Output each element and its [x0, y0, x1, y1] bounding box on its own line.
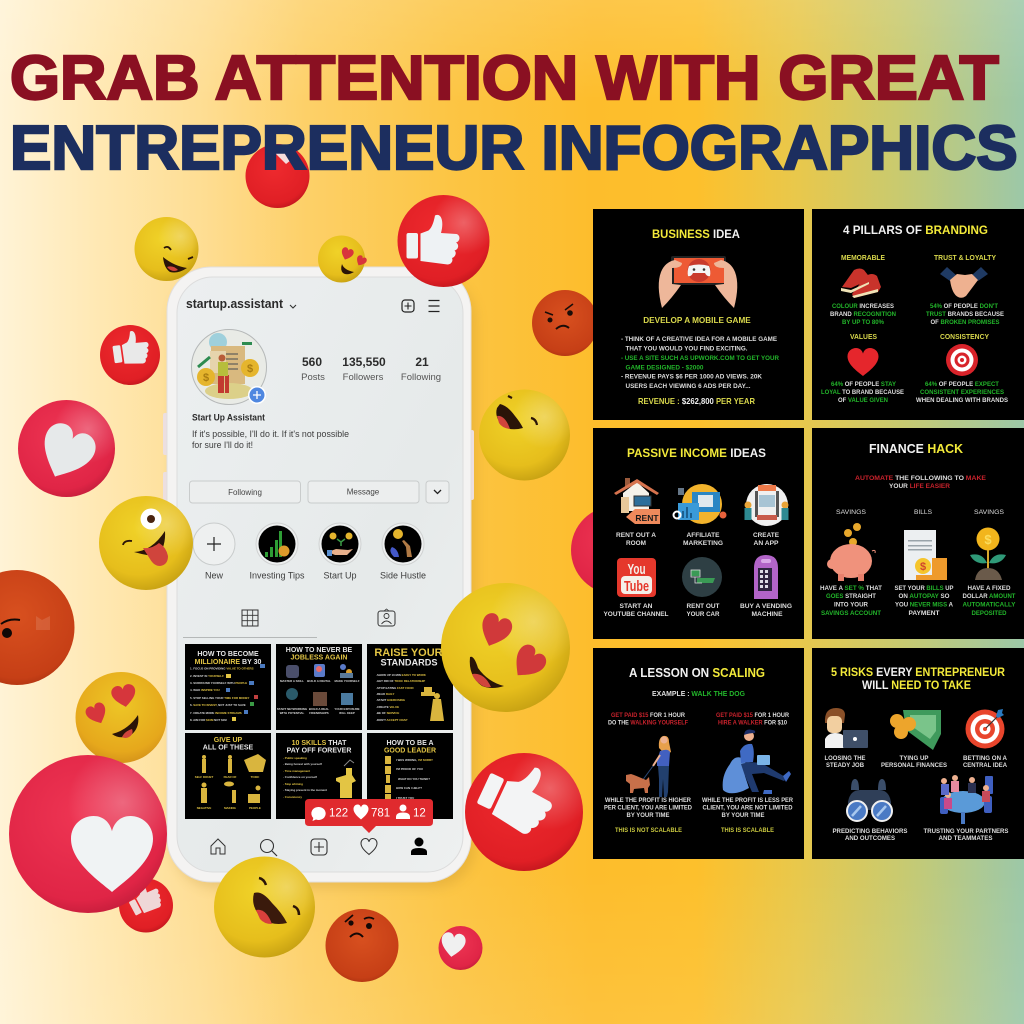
post tile 4: FEAR OF [224, 775, 237, 779]
title [10, 44, 1018, 183]
avatar [192, 330, 266, 404]
profile stats: 560 [302, 355, 322, 369]
pillar: memorable: BY UP TO 80% [842, 319, 884, 326]
post tile 4: TOXIC [251, 775, 260, 779]
post tile 2: BUILD A REAL [309, 707, 329, 711]
scenario: walking yourself: DO THE WALKING YOURSELF [608, 720, 688, 726]
post tile 6: GOOD LEADER [384, 748, 436, 754]
right explanation: WHILE THE PROFIT IS LESS PER [702, 797, 793, 804]
post tile 3 [367, 644, 453, 730]
post tile 6: HOW TO BE A [386, 740, 434, 747]
right explanation [702, 797, 793, 834]
idea: create an app [744, 484, 788, 547]
profile stats: Followers [343, 372, 384, 383]
risk: trusting partners and teammates: AND TEAMMATES [938, 835, 992, 842]
panel heading: PASSIVE INCOME IDEAS [627, 446, 766, 460]
notification bubble: 122 [329, 808, 348, 820]
profile buttons: Following [228, 488, 262, 497]
column: savings plant [962, 509, 1016, 617]
bio [192, 412, 349, 450]
idea: affiliate marketing [674, 484, 726, 547]
risk: betting on a central idea [963, 709, 1007, 769]
pillar: trust and loyalty [926, 255, 1004, 326]
post tile 2: MAKE YOURSELF [334, 679, 360, 683]
emoji: wide laugh right [479, 390, 570, 480]
post tile 2: FRIENDSHIPS [309, 711, 329, 715]
panel: passive income ideas [593, 428, 804, 639]
post tile 4: GIVE UP [214, 737, 243, 744]
post tile 5: 10 SKILLS THAT [292, 740, 347, 747]
panel: finance hack [812, 428, 1024, 639]
notification bubble: 781 [371, 808, 390, 820]
pillar: values: VALUES [850, 334, 877, 341]
post tile 5: - Time management [283, 769, 310, 773]
post tile 4: SELF DOUBT [195, 775, 213, 779]
pillar: trust and loyalty: 54% OF PEOPLE DON'T [930, 303, 998, 310]
risk: betting on a central idea: CENTRAL IDEA [963, 762, 1007, 769]
profile buttons: Message [347, 488, 380, 496]
body text: USERS EACH VIEWING 6 ADS PER DAY... [626, 383, 751, 390]
pillar: values: LOYAL TO BRAND BECAUSE [821, 389, 904, 396]
notification bubble [305, 799, 433, 833]
post tile 3: -READ DAILY [376, 692, 394, 696]
post tile 1: 5. STOP SELLING YOUR TIME FOR MONEY [190, 696, 250, 700]
post tile 2: JOBLESS AGAIN [291, 654, 347, 662]
scenario: walking yourself: GET PAID $15 FOR 1 HOUR [611, 712, 685, 719]
idea: start a youtube channel [604, 558, 668, 618]
panel heading: A LESSON ON SCALING [629, 666, 765, 680]
icon: mobile game in hands [659, 256, 737, 308]
post tile 6: HOW CAN I HELP? [396, 786, 422, 790]
idea: rent out your car: YOUR CAR [686, 611, 720, 618]
post tile 1: 8. AIM FOR $10M NOT $1M [190, 718, 227, 722]
post tile 5: - Being honest with yourself [283, 762, 322, 766]
pillar: values: OF VALUE GIVEN [838, 397, 888, 404]
post tile 5: - Consistency [283, 795, 302, 799]
idea: affiliate marketing: MARKETING [683, 540, 723, 547]
left explanation: THIS IS NOT SCALABLE [615, 827, 683, 834]
post tile 3: RAISE YOUR [374, 647, 443, 659]
pillar: trust and loyalty: OF BROKEN PROMISES [930, 319, 1000, 326]
profile header [186, 296, 440, 312]
pillar: trust and loyalty: TRUST BRANDS BECAUSE [926, 311, 1004, 318]
emoji: red ball behind title [246, 144, 310, 208]
risk: loosing the steady job: LOOSING THE [824, 755, 866, 762]
risk: tying up personal finances: PERSONAL FINANCES [881, 762, 947, 769]
post tile 1: 2. INVEST IN YOURSELF [190, 674, 224, 678]
post tile 1: 1. FOCUS ON PROVIDING VALUE TO OTHERS [190, 666, 254, 670]
pillar: memorable: COLOUR INCREASES [832, 303, 894, 310]
right explanation: BY YOUR TIME [722, 812, 764, 819]
post tile 3: -BE OF SERVICE [376, 711, 399, 715]
pillar: consistency: WHEN DEALING WITH BRANDS [916, 397, 1008, 404]
idea: affiliate marketing: AFFILIATE [686, 532, 720, 539]
bio: for sure I'll do it! [192, 440, 253, 450]
emoji: tongue wink [99, 496, 193, 590]
idea: buy a vending machine [740, 555, 792, 618]
post tile 4: MAKING [224, 806, 237, 810]
scenario: walking yourself [608, 712, 688, 797]
panel: a lesson on scaling [593, 648, 804, 859]
left explanation: WHILE THE PROFIT IS HIGHER [605, 797, 691, 804]
post tile 2: MASTER A SKILL [280, 679, 304, 683]
column: savings percent: INTO YOUR [834, 602, 868, 608]
emoji: laughing wink small [134, 217, 198, 281]
right explanation: THIS IS SCALABLE [721, 827, 775, 834]
post tile 1: 4. WHO INSPIRE YOU [190, 688, 220, 692]
post tile 3: -START EXERCISING [376, 698, 406, 702]
post tile 2: BUILD A DIGITAL [307, 679, 331, 683]
risk: predicting behaviors: AND OUTCOMES [845, 835, 895, 842]
post tile 2: YOUR EXPOSURE [334, 707, 360, 711]
post tile 2: WITH POTENTIAL [280, 711, 305, 715]
column: savings plant: DOLLAR AMOUNT [962, 593, 1016, 600]
post tile 3: -CREATE VALUE [376, 705, 399, 709]
revenue: REVENUE : $262,800 PER YEAR [638, 396, 755, 406]
post tile 4: ALL OF THESE [203, 744, 254, 752]
post tile 6: I WAS WRONG, I'M SORRY [396, 758, 433, 762]
left explanation: BY YOUR TIME [626, 812, 670, 819]
emoji: big heart [9, 755, 167, 913]
scenario: hire a walker: GET PAID $15 FOR 1 HOUR [716, 712, 789, 719]
profile stats [301, 355, 441, 383]
post tile 2 [276, 644, 362, 730]
pillar: memorable: MEMORABLE [841, 255, 885, 262]
idea: rent out your car: RENT OUT [686, 603, 720, 610]
idea: create an app: CREATE [753, 532, 779, 539]
risk: trusting partners and teammates [924, 775, 1008, 842]
story highlights: Side Hustle [380, 570, 426, 580]
panel heading: FINANCE HACK [869, 441, 964, 456]
body text: - REVENUE PAYS $6 PER 1000 AD VIEWS. 20K [621, 374, 762, 380]
story highlights: New [205, 570, 223, 580]
post tile 3: -STOP EATING FAST FOOD [376, 686, 414, 690]
emoji: big thumbs up bottom right [465, 751, 583, 871]
post tile 1: 6. SAVE TO INVEST, NOT JUST TO SAVE [190, 703, 246, 707]
post tile 1 [185, 644, 271, 730]
post tile 3: -SHOW UP 10 MIN EARLY TO WORK [376, 673, 427, 677]
emoji: laughing bottom [214, 856, 315, 958]
column: bills: YOU NEVER MISS A [895, 602, 953, 608]
example: EXAMPLE : WALK THE DOG [652, 689, 745, 698]
risk: betting on a central idea: BETTING ON A [963, 755, 1007, 762]
emoji: heart eyes small [318, 236, 368, 282]
idea: start a youtube channel: You [628, 561, 646, 578]
profile stats: Posts [301, 372, 325, 383]
profile tabs [183, 609, 395, 638]
profile stats: Following [401, 372, 441, 383]
column: savings plant: HAVE A FIXED [968, 585, 1011, 592]
avatar: $ [247, 363, 253, 375]
panel: business idea [593, 209, 804, 420]
idea: rent out your car [682, 557, 722, 618]
post tile 1: MILLIONAIRE BY 30 [195, 659, 261, 666]
profile buttons [190, 481, 449, 503]
right explanation: CLIENT, YOU ARE NOT LIMITED [702, 804, 793, 812]
emoji: big heart eyes [441, 583, 570, 712]
emoji: small thumb behind heart [119, 878, 173, 932]
intro text: YOUR LIFE EASIER [889, 483, 950, 490]
idea: start a youtube channel: Tube [624, 578, 649, 595]
emoji: angry bottom [326, 909, 398, 982]
idea: start a youtube channel: YOUTUBE CHANNEL [604, 611, 668, 618]
pillar: trust and loyalty: TRUST & LOYALTY [934, 255, 996, 262]
subheading: DEVELOP A MOBILE GAME [643, 315, 751, 325]
column: bills: ON AUTOPAY SO [898, 593, 950, 600]
post tile 6 [367, 733, 453, 819]
post tile 5 [276, 733, 362, 819]
pillar: values: 64% OF PEOPLE STAY [831, 381, 897, 388]
profile stats: 135,550 [342, 355, 386, 369]
column: savings percent: SAVINGS ACCOUNT [821, 610, 881, 617]
column: bills: BILLS [914, 509, 932, 516]
idea: rent out a room: RENT [635, 513, 659, 523]
panel heading: 5 RISKS EVERY ENTREPRENEUR [831, 667, 1006, 679]
column: savings plant: AUTOMATICALLY [962, 602, 1016, 608]
emoji: small heart bottom [438, 926, 482, 970]
idea: buy a vending machine: BUY A VENDING [740, 603, 792, 610]
bio: Start Up Assistant [192, 412, 265, 422]
column: savings percent: HAVE A SET % THAT [820, 585, 882, 592]
panel heading: BUSINESS IDEA [652, 227, 740, 241]
column: savings plant: $ [984, 532, 992, 547]
post tile 4: NEGATIVE [197, 806, 211, 810]
title: ENTREPRENEUR INFOGRAPHICS [10, 114, 1018, 183]
panel heading [831, 667, 1006, 692]
intro text [855, 475, 986, 490]
emoji: angry left [0, 570, 74, 685]
column: bills [894, 509, 954, 617]
avatar: $ [203, 372, 209, 384]
scenario: hire a walker: HIRE A WALKER FOR $10 [718, 720, 787, 726]
profile header: startup.assistant [186, 296, 284, 311]
post tile 4 [185, 733, 271, 819]
pillar: values [821, 334, 904, 404]
panel heading: WILL NEED TO TAKE [862, 680, 971, 692]
phone [163, 267, 476, 888]
column: savings percent: GOES STRAIGHT [826, 593, 876, 600]
risk: predicting behaviors: PREDICTING BEHAVIORS [832, 828, 908, 835]
post tile 5: - Staying present in the moment [283, 788, 327, 792]
emoji: red heart ball behind panel [571, 506, 659, 594]
post tile 2: START NETWORKING [277, 707, 308, 711]
emoji: big thumbs up top [398, 195, 490, 287]
post tile 5: PAY OFF FOREVER [287, 748, 351, 754]
pillar: consistency: CONSISTENCY [940, 334, 989, 341]
story highlights [193, 523, 426, 580]
post tile 5: - Public speaking [283, 756, 307, 760]
post tile 5: - Stop whining [283, 782, 303, 786]
idea: create an app: AN APP [754, 540, 779, 547]
column: savings percent [820, 509, 882, 617]
risk: loosing the steady job: STEADY JOB [826, 762, 864, 769]
body text: THAT YOU WOULD YOU FIND EXCITING. [626, 346, 748, 352]
risk: loosing the steady job [824, 708, 868, 769]
column: savings percent: SAVINGS [836, 509, 866, 516]
pillar: memorable [830, 255, 896, 326]
panel heading: 4 PILLARS OF BRANDING [843, 223, 988, 237]
post tile 1: HOW TO BECOME [197, 651, 259, 658]
story highlights: Investing Tips [249, 570, 305, 580]
body text: GAME DESIGNED - $2000 [626, 364, 704, 372]
phone screen [177, 277, 463, 872]
story highlights: Start Up [323, 570, 357, 580]
idea: start a youtube channel: START AN [620, 603, 653, 610]
pillar: consistency [916, 334, 1008, 404]
column: bills: $ [920, 561, 926, 573]
scenario: hire a walker [716, 712, 791, 794]
panel: 5 risks every entrepreneur [812, 648, 1024, 859]
pillar: consistency: CONSISTENT EXPERIENCES [920, 389, 1004, 396]
column: savings plant: SAVINGS [974, 509, 1004, 516]
pillar: memorable: BRAND RECOGNITION [830, 311, 896, 318]
column: savings plant: DEPOSITED [972, 610, 1007, 617]
idea: buy a vending machine: MACHINE [752, 611, 783, 618]
emoji: heart left [18, 400, 115, 497]
emoji: heart eyes left [76, 672, 166, 763]
panel: 4 pillars of branding [812, 209, 1024, 420]
notification bubble: 12 [413, 808, 426, 820]
title: GRAB ATTENTION WITH GREAT [10, 44, 999, 113]
bio: If it's possible, I'll do it. If it's not possible [192, 429, 349, 439]
pillar: consistency: 64% OF PEOPLE EXPECT [925, 381, 999, 388]
idea: rent out a room [614, 478, 660, 547]
risk: trusting partners and teammates: TRUSTING YOUR PARTNERS [924, 828, 1008, 835]
post tile 1: 7. CREATE MORE INCOME STREAMS [190, 711, 242, 715]
post tile 1: 3. SURROUND YOURSELF WITH PEOPLE [190, 681, 247, 685]
body text [621, 336, 779, 390]
risk: tying up personal finances [881, 710, 947, 769]
post tile 6: I TRUST YOU [396, 796, 414, 800]
phone shadow [172, 276, 476, 888]
bottom navigation [211, 838, 427, 856]
post tile 6: I'M PROUD OF YOU [396, 767, 423, 771]
post tile 4: PEOPLE [249, 806, 261, 810]
post tile 3: -GET RID OF TOXIC RELATIONSHIP [376, 679, 425, 683]
body text: - USE A SITE SUCH AS UPWORK.COM TO GET YOUR [621, 355, 779, 362]
post tile 3: STANDARDS [380, 658, 438, 668]
risk: predicting behaviors [832, 779, 908, 842]
left explanation: PER CLIENT, YOU ARE LIMITED [604, 804, 692, 812]
emoji: angry ball behind panels [532, 290, 598, 356]
post tile 2: HOW TO NEVER BE [286, 647, 353, 654]
intro text: AUTOMATE THE FOLLOWING TO MAKE [855, 475, 986, 482]
post tile 3: -DON'T ACCEPT CRAP [376, 718, 407, 722]
column: bills: SET YOUR BILLS UP [894, 585, 954, 592]
profile stats: 21 [415, 355, 429, 369]
risk: tying up personal finances: TYING UP [900, 755, 928, 762]
post tile 6: WHAT DO YOU THINK? [398, 777, 430, 781]
body text: - THINK OF A CREATIVE IDEA FOR A MOBILE GAME [621, 336, 777, 343]
post tile 2: WILL KEEP [339, 711, 355, 715]
phone side buttons [163, 413, 474, 502]
idea: rent out a room: ROOM [626, 540, 646, 547]
column: bills: PAYMENT [908, 610, 940, 617]
emoji: small thumbs up [100, 325, 160, 385]
phone body [167, 267, 471, 882]
post tile 5: - Confidence on yourself [283, 775, 317, 779]
left explanation [604, 797, 692, 834]
idea: rent out a room: RENT OUT A [616, 532, 656, 539]
